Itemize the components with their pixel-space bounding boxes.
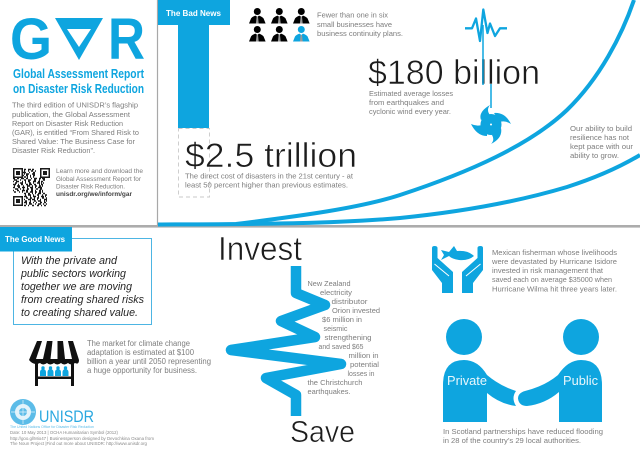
billion description — [369, 89, 453, 116]
New Zealand text: $6 million in — [322, 315, 362, 324]
billion description: Estimated average losses — [369, 89, 453, 98]
market text: billion a year until 2050 representing — [87, 357, 211, 366]
intro paragraph — [12, 100, 139, 155]
intro paragraph: The third edition of UNISDR’s flagship — [12, 100, 138, 110]
New Zealand text: earthquakes. — [308, 387, 350, 396]
download call to action: Learn more and download the — [56, 168, 144, 175]
zigzag: invest to save — [231, 266, 341, 416]
billion description: from earthquakes and — [369, 98, 444, 107]
blue bar: 2.5 trillion — [178, 25, 209, 128]
report title — [13, 67, 145, 96]
market text: The market for climate change — [87, 339, 190, 348]
dashed bar outline: previous estimates — [178, 128, 210, 197]
GAR logo: G — [10, 7, 52, 72]
UNISDR tagline: The United Nations Office for Disaster Risk Reduction — [10, 425, 94, 429]
resilience text — [570, 124, 634, 160]
small business text — [317, 10, 403, 38]
icon: seismic wave with line — [465, 10, 507, 108]
download call to action: Disaster Risk Reduction. — [56, 184, 125, 190]
New Zealand text: strengthening — [324, 333, 372, 342]
New Zealand text: and saved $65 — [318, 342, 364, 351]
good news heading tab — [0, 227, 72, 252]
download call to action — [56, 168, 144, 198]
New Zealand text: losses in — [348, 369, 374, 378]
intro paragraph: publication, the Global Assessment — [12, 110, 130, 119]
fisherman text: were devastated by Hurricane Isidore — [491, 257, 617, 266]
fisherman text: saved each on average $35000 when — [492, 275, 612, 284]
download call to action: Global Assessment Report for — [56, 176, 141, 183]
credits: http://goo.gl/Mio47 | Businessperson designed by Devochkina Oxana from — [10, 436, 155, 441]
market text: a huge opportunity for business. — [87, 366, 197, 375]
icon: six business people — [249, 8, 310, 42]
credits: The Noun Project |Find out more about UNISDR: http://www.unisdr.org — [10, 441, 148, 446]
quote text: together we are moving — [21, 281, 132, 293]
icon: QR code — [13, 168, 50, 206]
credits — [10, 430, 155, 446]
divider lines — [156, 0, 158, 225]
icon: UN emblem — [10, 399, 36, 425]
New Zealand text: seismic — [324, 324, 348, 333]
market text: adaptation is estimated at $100 — [87, 348, 195, 357]
New Zealand text: New Zealand — [308, 279, 350, 288]
quote text — [20, 255, 145, 319]
quote text: from creating shared risks — [21, 294, 145, 306]
intro paragraph: Disaster Risk Reduction”. — [12, 146, 95, 155]
New Zealand text: electricity — [320, 288, 352, 297]
intro paragraph: Shared Value: The Business Case for — [12, 137, 136, 146]
private label: Private — [447, 373, 487, 388]
small business text: business continuity plans. — [317, 29, 403, 38]
resilience text: kept pace with our — [570, 142, 634, 151]
panel: the good news — [0, 227, 617, 449]
big number: 180 billion: $180 billion — [368, 54, 540, 92]
intro paragraph: Report on Disaster Risk Reduction — [12, 119, 123, 128]
quote box — [14, 238, 152, 324]
resilience text: resilience has not — [570, 133, 629, 142]
New Zealand text: Orion invested — [332, 306, 380, 315]
icon: market stall — [29, 341, 79, 386]
icon: cyclone — [471, 105, 511, 144]
New Zealand text: million in — [348, 351, 378, 360]
small business text: small businesses have — [317, 20, 392, 29]
resilience text: ability to grow. — [570, 151, 619, 160]
billion description: cyclonic wind every year. — [369, 107, 451, 116]
public label: Public — [563, 373, 598, 388]
UNISDR logo — [10, 399, 94, 429]
New Zealand text: distributor — [332, 297, 368, 306]
credits: Date: 10 May 2013 | OCHA Humanitarian Symbol (2012) — [10, 430, 119, 435]
New Zealand text: the Christchurch — [308, 378, 362, 387]
top strip — [158, 0, 230, 25]
quote text: public sectors working — [20, 268, 126, 280]
trillion description: The direct cost of disasters in the 21st century - at — [185, 172, 353, 180]
fisherman text: Hurricane Wilma hit three years later. — [492, 284, 617, 294]
panel: the bad news — [158, 0, 640, 224]
resilience text: Our ability to build — [570, 124, 632, 133]
good news heading: The Good News — [5, 235, 66, 244]
report title: Global Assessment Report — [13, 67, 145, 81]
Scotland text: in 28 of the country’s 29 local authorities. — [443, 436, 581, 445]
intro paragraph: (GAR), is entitled “From Shared Risk to — [12, 128, 139, 137]
quote text: to creating shared value. — [21, 307, 138, 319]
trillion description — [185, 172, 353, 190]
save heading: Save — [290, 414, 355, 449]
icon: hands holding fish — [432, 246, 483, 293]
invest heading: Invest — [218, 230, 302, 267]
small business text: Fewer than one in six — [317, 10, 388, 20]
market text — [87, 339, 211, 375]
GAR logo: R — [108, 7, 145, 72]
Scotland text: In Scotland partnerships have reduced flooding — [443, 427, 603, 436]
big number: 2.5 trillion: $2.5 trillion — [185, 137, 357, 175]
public person — [518, 319, 602, 422]
growth curves — [158, 0, 640, 224]
fisherman text — [491, 248, 617, 294]
New Zealand text — [308, 279, 380, 396]
fisherman text: invested in risk management that — [492, 266, 603, 275]
private person — [443, 319, 516, 422]
report title: on Disaster Risk Reduction — [13, 82, 144, 96]
GAR logo — [10, 7, 145, 72]
trillion description: least 50 percent higher than previous estimates. — [185, 180, 348, 190]
download call to action: unisdr.org/we/inform/gar — [56, 191, 133, 198]
Scotland text — [443, 427, 603, 445]
fisherman text: Mexican fisherman whose livelihoods — [492, 248, 617, 257]
UNISDR wordmark: UNISDR — [39, 407, 94, 426]
quote text: With the private and — [21, 255, 118, 267]
bad news heading: The Bad News — [166, 9, 222, 18]
icon: handshake private and public — [443, 319, 602, 422]
New Zealand text: potential — [350, 360, 379, 369]
panel: report introduction — [10, 7, 145, 206]
